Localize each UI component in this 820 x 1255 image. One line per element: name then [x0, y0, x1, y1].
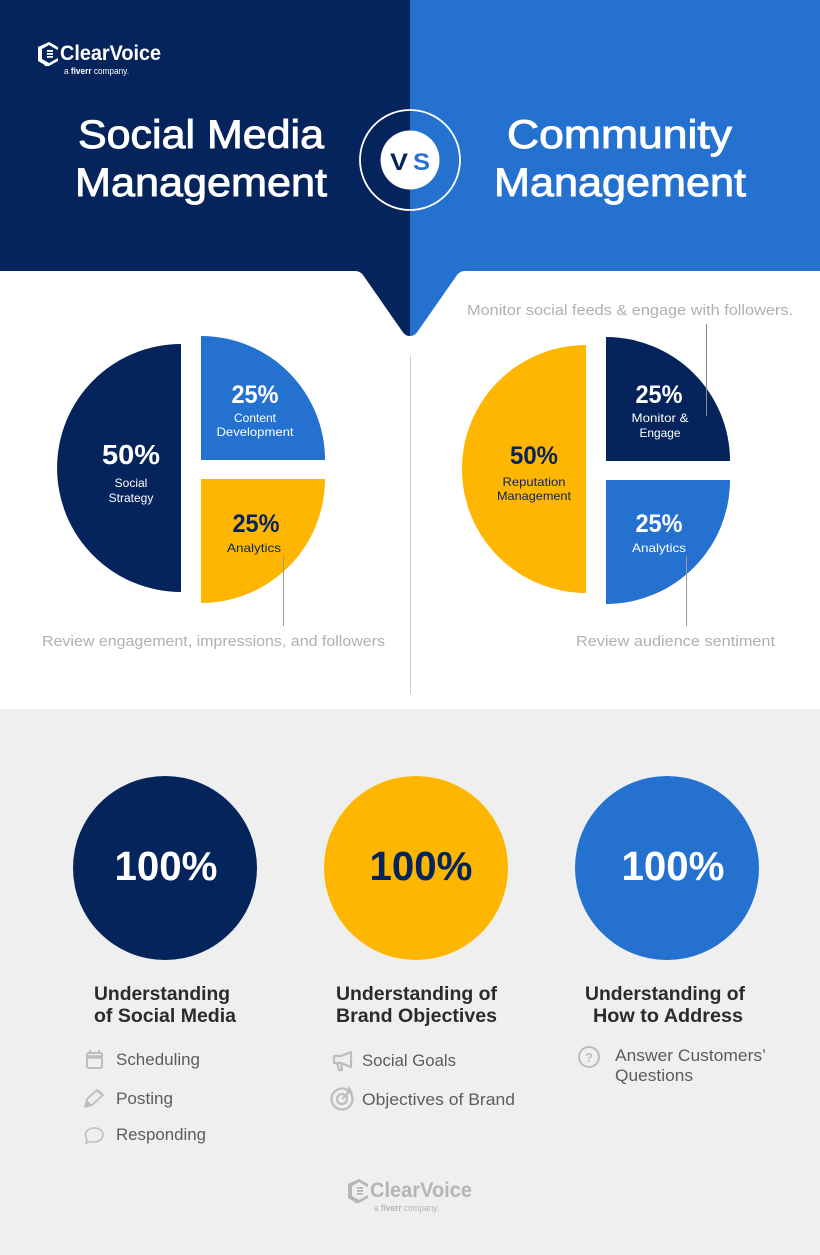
segment: analytics 25% [201, 479, 325, 603]
heading: understanding of social media: of Social Media [94, 1005, 236, 1027]
segment: analytics 25% [606, 480, 730, 604]
segment: analytics 25%: 25% [232, 510, 280, 538]
text: posting: Posting [116, 1089, 173, 1108]
pie chart: social media management [57, 336, 325, 603]
header: right blue panel with pointer [410, 0, 820, 336]
segment: analytics 25%: Analytics [227, 541, 281, 555]
segment: monitor and engage 25%: Monitor & [632, 411, 688, 425]
logo: ClearVoice top: ClearVoice [60, 42, 161, 65]
heading: understanding of how to address: How to Address [593, 1005, 743, 1027]
segment: content development 25%: Development [216, 425, 294, 439]
heading: understanding of brand objectives: Understanding of [336, 983, 497, 1005]
logo: ClearVoice bottom [348, 1179, 472, 1213]
segment: monitor and engage 25% [606, 337, 730, 461]
segment: monitor and engage 25%: Engage [640, 426, 681, 440]
text: social goals: Social Goals [362, 1051, 456, 1070]
heading: understanding of brand objectives: Brand Objectives [336, 1005, 497, 1027]
circle stat: 100% blue: 100% [622, 843, 724, 889]
vs badge: S [413, 149, 430, 176]
callout: monitor social feeds: Monitor social feeds & engage with followers. [467, 302, 793, 319]
icon: pencil [85, 1090, 103, 1107]
title: Community Management [494, 113, 746, 205]
heading: understanding of how to address: Understanding of [585, 983, 745, 1005]
circle stat: 100% navy [73, 776, 257, 960]
circle stat: 100% navy: 100% [114, 843, 218, 889]
segment: analytics 25%: Analytics [632, 541, 686, 555]
title: Social Media Management: Social Media [78, 113, 325, 157]
heading: understanding of how to address [585, 983, 745, 1027]
pie chart: community management [462, 337, 730, 604]
text: answer customers' questions: Questions [615, 1066, 693, 1085]
logo: ClearVoice bottom: ClearVoice [370, 1179, 472, 1202]
callout: review audience sentiment: Review audience sentiment [576, 633, 776, 650]
heading: understanding of social media: Understanding [94, 983, 230, 1005]
icon: target [332, 1087, 352, 1110]
vs badge [360, 110, 460, 210]
icon: calendar [87, 1050, 102, 1068]
column: brand objectives [324, 776, 515, 1110]
text: scheduling: Scheduling [116, 1050, 200, 1069]
segment: social strategy 50%: 50% [102, 439, 160, 470]
icon: megaphone [334, 1052, 351, 1070]
header: left navy panel with pointer [0, 0, 410, 336]
logo: ClearVoice top: a fiverr company. [64, 66, 129, 76]
bottom panel [0, 709, 820, 1255]
callout: review engagement: Review engagement, impressions, and followers [42, 633, 385, 650]
icon: question mark [579, 1047, 599, 1067]
column: how to address [575, 776, 766, 1085]
title: Social Media Management [75, 113, 327, 205]
icon: question mark: ? [585, 1050, 593, 1065]
segment: content development 25% [201, 336, 325, 460]
segment: analytics 25%: 25% [636, 510, 682, 538]
title: Community Management: Community [507, 113, 732, 157]
circle stat: 100% yellow: 100% [370, 843, 472, 889]
segment: reputation management 50%: Reputation [502, 475, 566, 489]
segment: content development 25%: 25% [232, 381, 278, 409]
text: responding: Responding [116, 1125, 206, 1144]
circle stat: 100% blue [575, 776, 759, 960]
title: Community Management: Management [494, 161, 746, 205]
text: answer customers' questions: Answer Customers’ [615, 1046, 766, 1065]
column: social media [73, 776, 257, 1144]
segment: reputation management 50%: 50% [510, 442, 558, 470]
segment: monitor and engage 25%: 25% [636, 381, 682, 409]
title: Social Media Management: Management [75, 161, 327, 205]
heading: understanding of social media [94, 983, 236, 1027]
segment: social strategy 50%: Social [115, 476, 147, 490]
segment: reputation management 50%: Management [497, 489, 572, 503]
segment: social strategy 50% [57, 344, 181, 592]
centre divider [410, 355, 411, 694]
segment: social strategy 50%: Strategy [109, 491, 153, 505]
text: objectives of brand: Objectives of Brand [362, 1090, 515, 1109]
segment: content development 25%: Content [234, 411, 277, 425]
text: answer customers' questions [615, 1046, 766, 1085]
vs badge: V [390, 149, 409, 176]
logo: ClearVoice bottom: a fiverr company. [374, 1203, 439, 1213]
logo: ClearVoice top [38, 42, 161, 76]
heading: understanding of brand objectives [336, 983, 497, 1027]
icon: speech bubble [86, 1128, 103, 1143]
segment: reputation management 50% [462, 345, 586, 593]
circle stat: 100% yellow [324, 776, 508, 960]
